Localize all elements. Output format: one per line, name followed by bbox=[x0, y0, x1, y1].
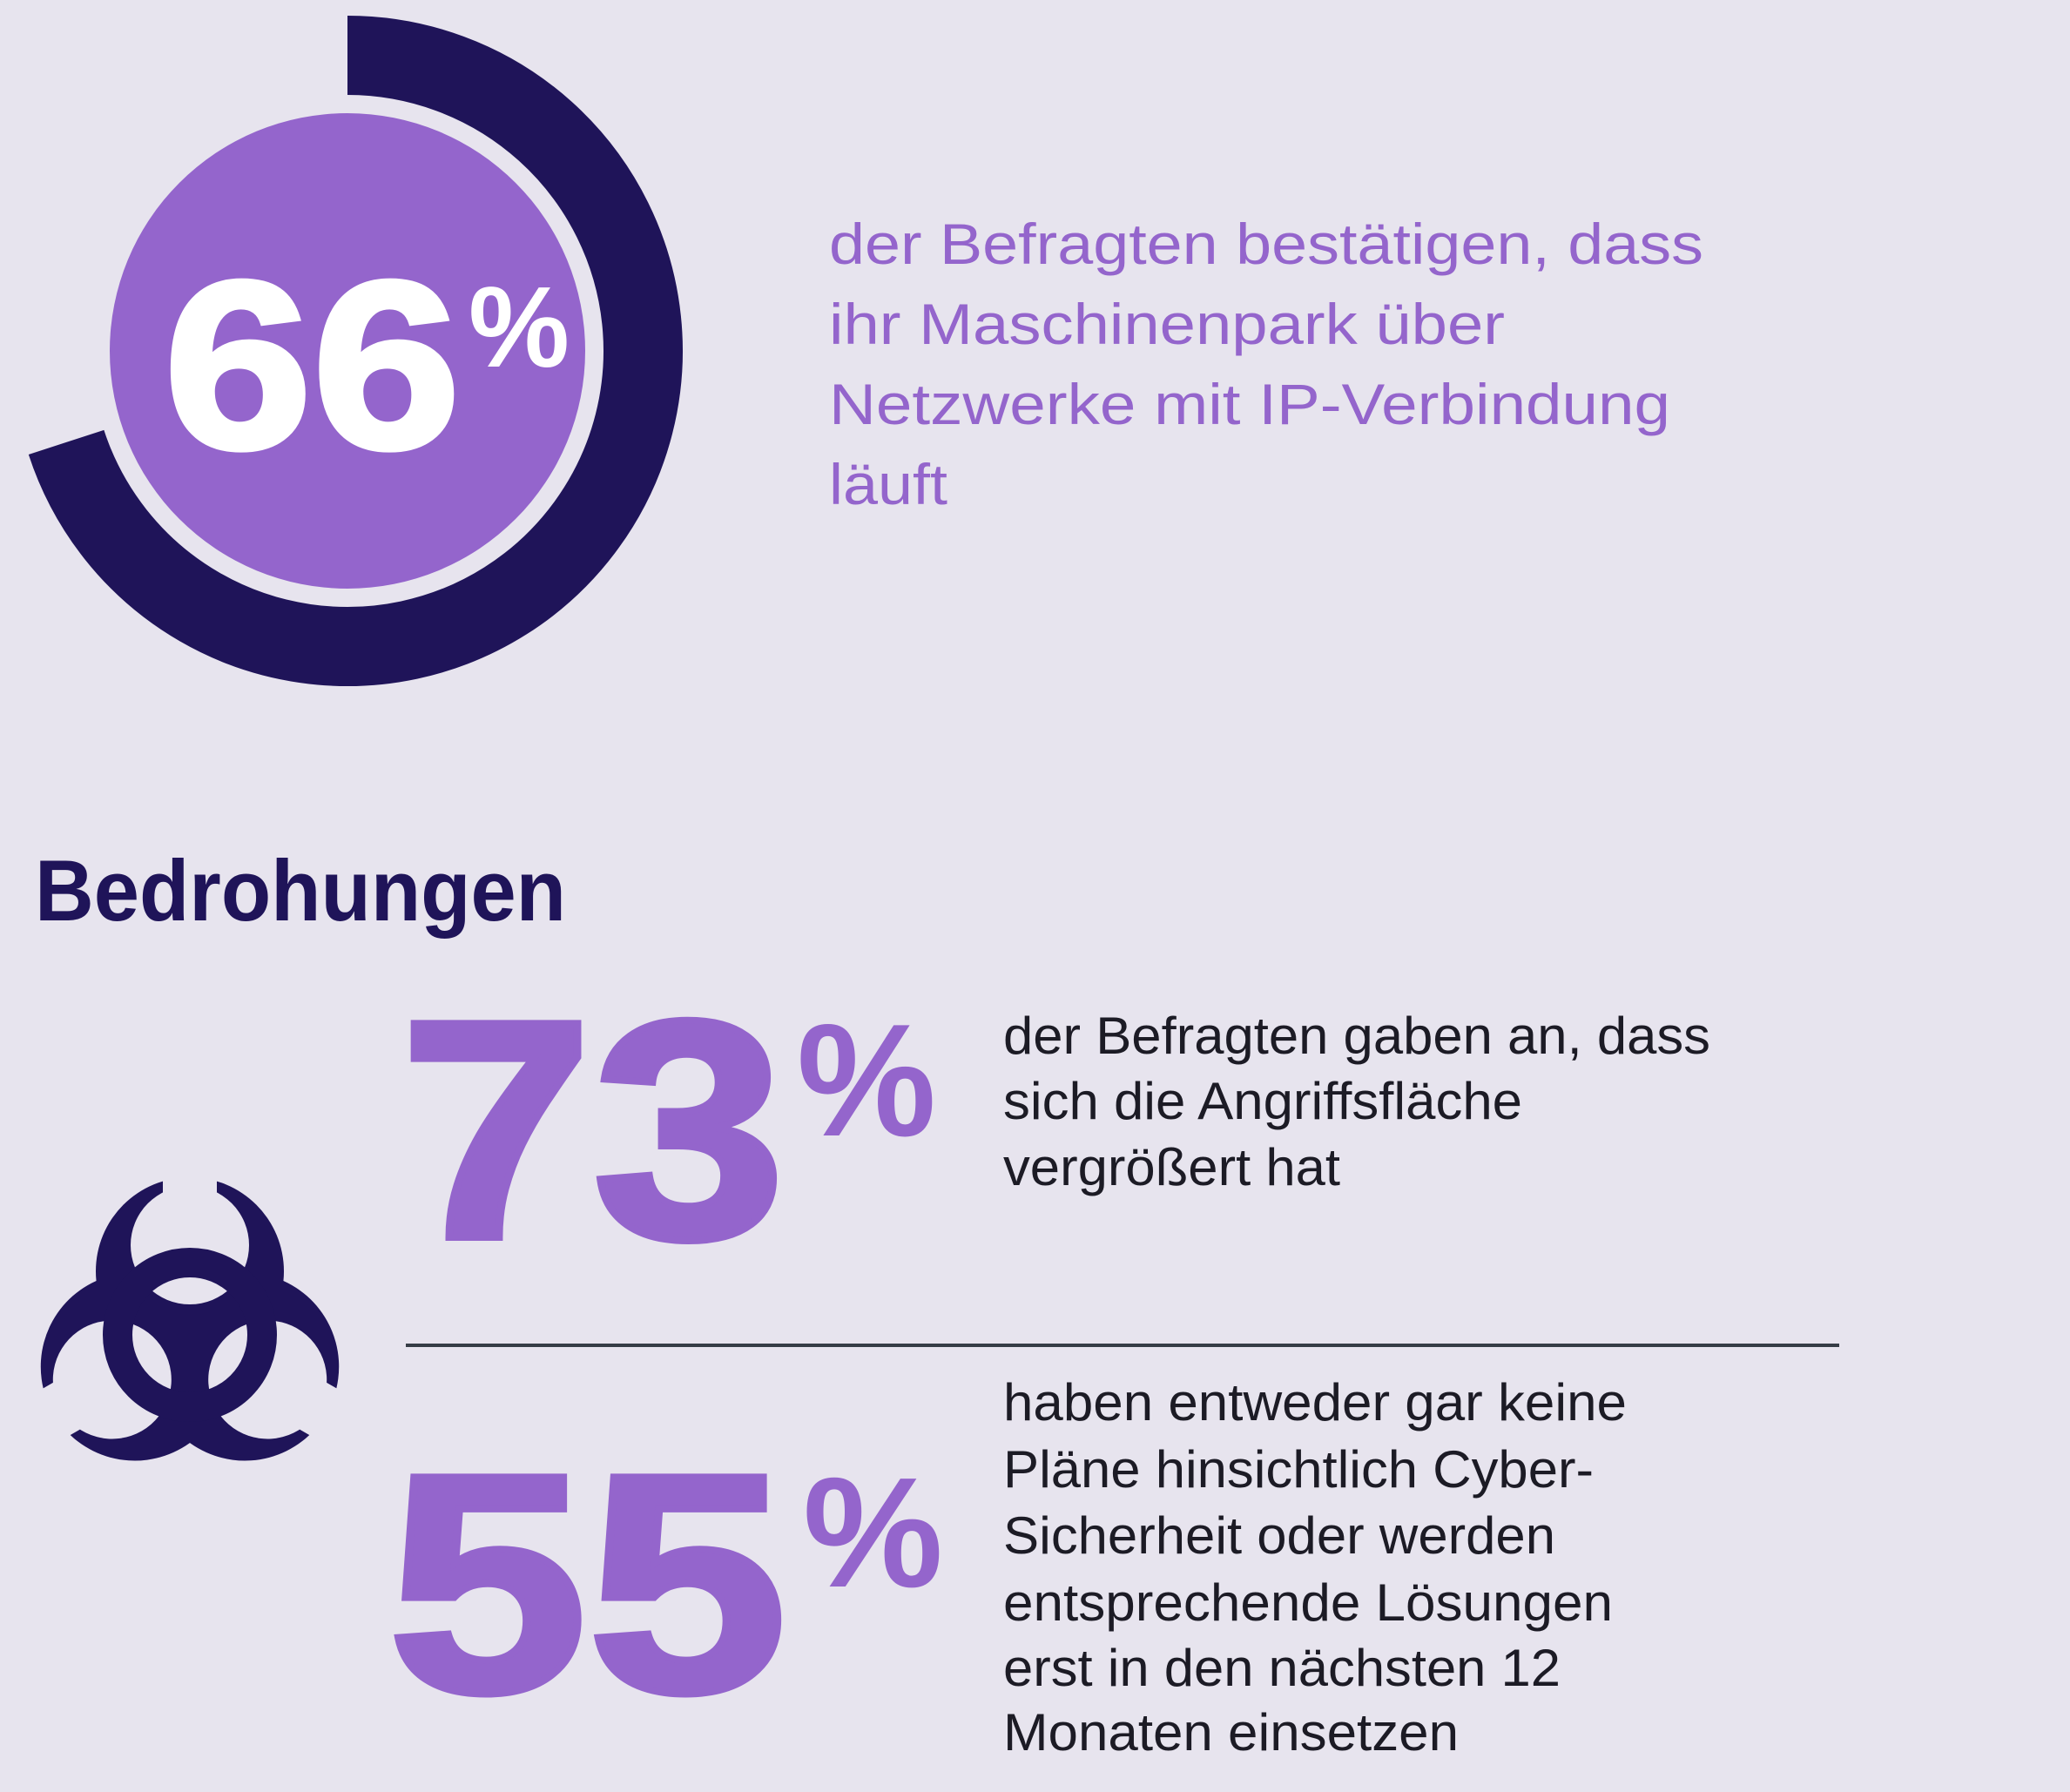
text block: 66% description: der Befragten bestätigen, dass bbox=[829, 212, 1703, 276]
big number 66%: 66 bbox=[164, 232, 461, 499]
stat: 73%: % bbox=[797, 990, 936, 1169]
text block: 73% description: sich die Angriffsfläche bbox=[1003, 1072, 1522, 1130]
stat: 55%: % bbox=[803, 1445, 943, 1620]
stat: 55%: 55 bbox=[388, 1410, 787, 1757]
text block: 73% description bbox=[1003, 1007, 1710, 1196]
inner purple circle bbox=[110, 113, 585, 589]
icon: biohazard bbox=[40, 1181, 340, 1461]
text block: 66% description: ihr Maschinenpark über bbox=[829, 292, 1505, 356]
text block: 66% description: läuft bbox=[829, 452, 947, 516]
text block: 66% description bbox=[829, 212, 1703, 516]
text block: 73% description: vergrößert hat bbox=[1003, 1138, 1340, 1196]
stat: 55% bbox=[388, 1410, 943, 1757]
donut chart: 66% bbox=[66, 56, 643, 646]
text block: 55% description: entsprechende Lösungen bbox=[1003, 1573, 1613, 1632]
text block: 66% description: Netzwerke mit IP-Verbindung bbox=[829, 372, 1670, 436]
stat: 73% bbox=[400, 956, 936, 1304]
heading: Bedrohungen: Bedrohungen bbox=[35, 842, 566, 939]
text block: 55% description: erst in den nächsten 12 bbox=[1003, 1639, 1561, 1697]
text block: 55% description bbox=[1003, 1373, 1627, 1762]
text block: 55% description: Monaten einsetzen bbox=[1003, 1703, 1459, 1762]
big number 66%: % bbox=[469, 263, 570, 391]
text block: 55% description: Pläne hinsichtlich Cyber- bbox=[1003, 1440, 1594, 1499]
text block: 73% description: der Befragten gaben an, dass bbox=[1003, 1007, 1710, 1065]
donut ring arc bbox=[66, 56, 643, 646]
stat: 73%: 73 bbox=[400, 956, 786, 1304]
big number 66% bbox=[164, 232, 570, 499]
text block: 55% description: Sicherheit oder werden bbox=[1003, 1506, 1555, 1565]
text block: 55% description: haben entweder gar keine bbox=[1003, 1373, 1627, 1432]
